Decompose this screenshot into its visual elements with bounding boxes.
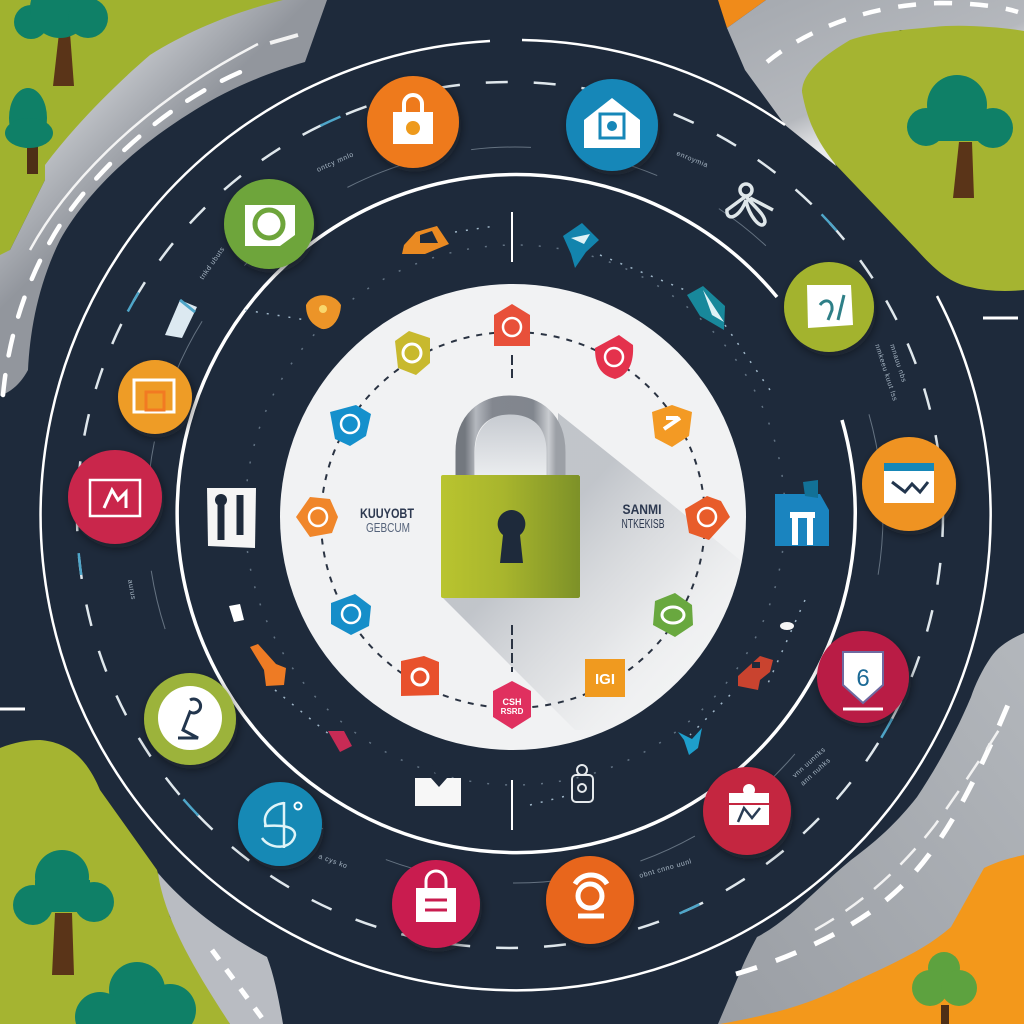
arc captions: tnkd ubuts	[199, 246, 227, 281]
padlock shackle opening	[475, 414, 547, 478]
padlock cast shadow	[443, 413, 740, 730]
inner badge: yellow	[395, 331, 430, 375]
inner badge: orange upper right	[652, 405, 692, 447]
outer icon: frame orange	[118, 360, 192, 434]
tree: bottom-left lower	[75, 962, 196, 1024]
small icon: white drop	[229, 604, 244, 622]
arc captions: nmkeeu kuut lss	[873, 343, 898, 402]
left centre label: KUUYOBT	[360, 505, 414, 521]
inner badge: top red	[494, 304, 530, 346]
padlock	[441, 405, 580, 598]
road edge ticks	[0, 212, 1018, 830]
small icon: gem	[687, 286, 725, 330]
arc captions: mnauu nbs	[888, 343, 907, 384]
inner badge: bottom crimson	[493, 681, 531, 729]
outer icon: shirt olive	[784, 262, 874, 352]
inner badge: left orange	[296, 497, 338, 537]
arc captions: ontcy mnlo	[316, 151, 355, 174]
tree: bottom-right	[912, 952, 977, 1024]
inner badge: blue lower left	[331, 594, 371, 635]
outer icon: shield crimson: 6	[856, 665, 870, 692]
outer icon: gift red	[703, 767, 791, 855]
right centre label: NTKEKISB	[622, 516, 664, 531]
small icon: map pin	[306, 295, 341, 329]
arc captions: a cys ko	[317, 853, 348, 870]
small icon: car	[402, 226, 449, 254]
small icon: scooter	[165, 300, 197, 338]
arc captions: aurus	[126, 579, 136, 601]
tree: top-right	[907, 75, 1013, 198]
tree: top-left small	[5, 88, 53, 174]
arc captions: vnn uunnks	[792, 746, 827, 779]
centre disc	[280, 284, 746, 750]
inner badge: orange folder: IGI	[595, 671, 615, 688]
inner badge: bottom crimson: RSRD	[501, 707, 524, 716]
arc captions: enroymia	[675, 150, 709, 169]
padlock keyhole	[498, 510, 525, 563]
landscape: bottom-right corner	[718, 633, 1024, 1024]
outer icon: document crimson	[68, 450, 162, 544]
inner badge: crimson	[595, 335, 633, 379]
inner badge: right orange-red	[685, 496, 730, 540]
tree: bottom-left large	[13, 850, 114, 975]
small icon: white oval	[780, 622, 794, 630]
right centre label: SANMI	[622, 501, 662, 517]
connecting dots	[245, 226, 805, 805]
padlock shackle	[465, 405, 556, 478]
small icon: blue tag	[775, 480, 829, 546]
small icon: wrench card	[207, 488, 256, 548]
inner badge: orange-red square	[401, 656, 439, 696]
outer icon: camera green	[224, 179, 314, 269]
inner badge: bottom crimson: CSH	[502, 697, 522, 707]
arc captions: obnt cnno uunl	[639, 858, 693, 880]
landscape: top-right corner	[718, 0, 1024, 291]
arc captions	[126, 150, 907, 880]
small icon: blue bird	[678, 728, 702, 755]
outer icon: monitor amber	[862, 437, 956, 531]
right centre label	[622, 501, 664, 531]
small icon: ribbon	[727, 184, 773, 225]
outer icon: house blue	[566, 79, 658, 171]
inner badge: green	[653, 593, 693, 637]
arc captions: ann nuhks	[800, 757, 832, 787]
outer icon: shield crimson	[817, 631, 909, 723]
outer icon: bag crimson	[392, 860, 480, 948]
tree: top-left large	[14, 0, 108, 86]
outer icon: padlock orange	[367, 76, 459, 168]
landscape: top-left corner	[0, 0, 327, 396]
outer icon: symbol blue	[238, 782, 322, 866]
left centre label: GEBCUM	[366, 520, 410, 535]
inner badge: orange folder	[585, 659, 625, 697]
padlock body	[441, 475, 580, 598]
landscape: bottom-left corner	[0, 740, 283, 1024]
outer icon: figure olive	[144, 673, 236, 765]
outer icon: person orange	[546, 856, 634, 944]
inner dotted orbit	[321, 332, 705, 708]
small icon: speech bubble	[563, 223, 599, 268]
small icon: red car	[738, 656, 773, 690]
small icon: envelope	[415, 765, 461, 806]
small icon: orange wrench	[250, 644, 286, 686]
small icon: outlined bag	[572, 765, 593, 802]
small icon: red arrow	[328, 731, 352, 752]
inner badge: blue upper left	[330, 405, 371, 446]
left centre label	[360, 505, 414, 535]
